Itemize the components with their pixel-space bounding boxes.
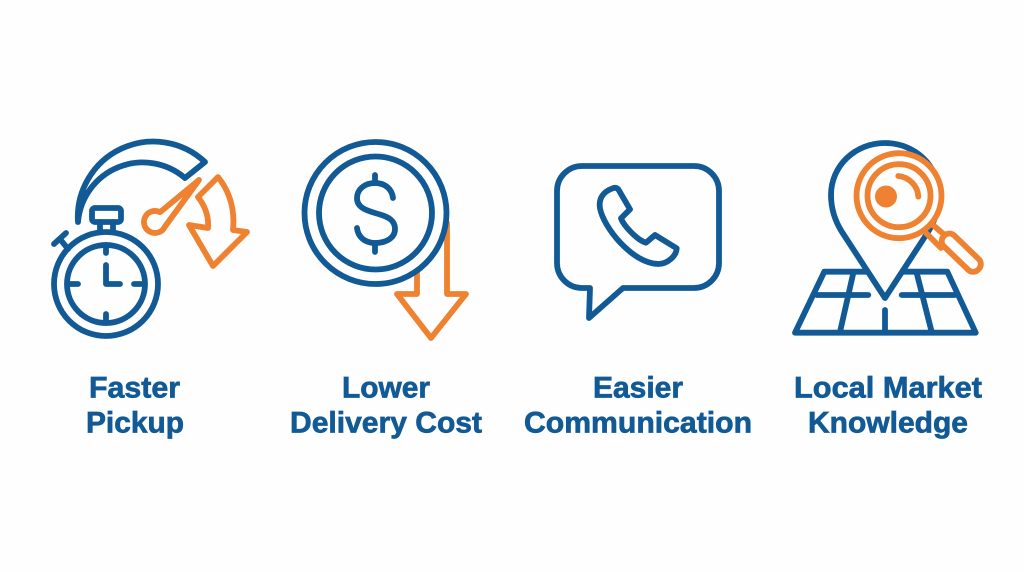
- icon: speech bubble: [557, 166, 719, 318]
- heading: lower delivery cost: Delivery Cost: [290, 406, 482, 440]
- heading: local market knowledge: Local Market: [794, 372, 982, 404]
- heading: easier communication: [524, 372, 752, 440]
- heading: lower delivery cost: [290, 372, 482, 440]
- icon: folded map: [795, 272, 976, 333]
- heading: local market knowledge: Knowledge: [808, 406, 968, 440]
- heading: faster pickup: [86, 372, 184, 440]
- icon: speedometer needle: [144, 180, 199, 233]
- heading: easier communication: Easier: [593, 372, 683, 404]
- icon: dollar coin: [304, 142, 446, 284]
- panel: faster pickup: [54, 142, 247, 440]
- heading: faster pickup: Faster: [89, 372, 180, 404]
- heading: lower delivery cost: Lower: [342, 372, 430, 404]
- heading: easier communication: Communication: [524, 406, 752, 440]
- icon: stopwatch: [54, 208, 158, 336]
- icon: curved down arrow: [189, 177, 247, 266]
- panel: lower delivery cost: [290, 142, 482, 440]
- icon: location pin: [831, 143, 939, 298]
- heading: faster pickup: Pickup: [86, 406, 184, 440]
- icon: magnifying glass: [856, 153, 984, 275]
- heading: local market knowledge: [794, 372, 982, 440]
- panel: easier communication: [524, 166, 752, 440]
- icon: down arrow: [397, 223, 466, 338]
- icon: speedometer arc: [78, 142, 205, 222]
- panel: local market knowledge: [794, 143, 984, 440]
- icon: telephone handset: [600, 188, 677, 264]
